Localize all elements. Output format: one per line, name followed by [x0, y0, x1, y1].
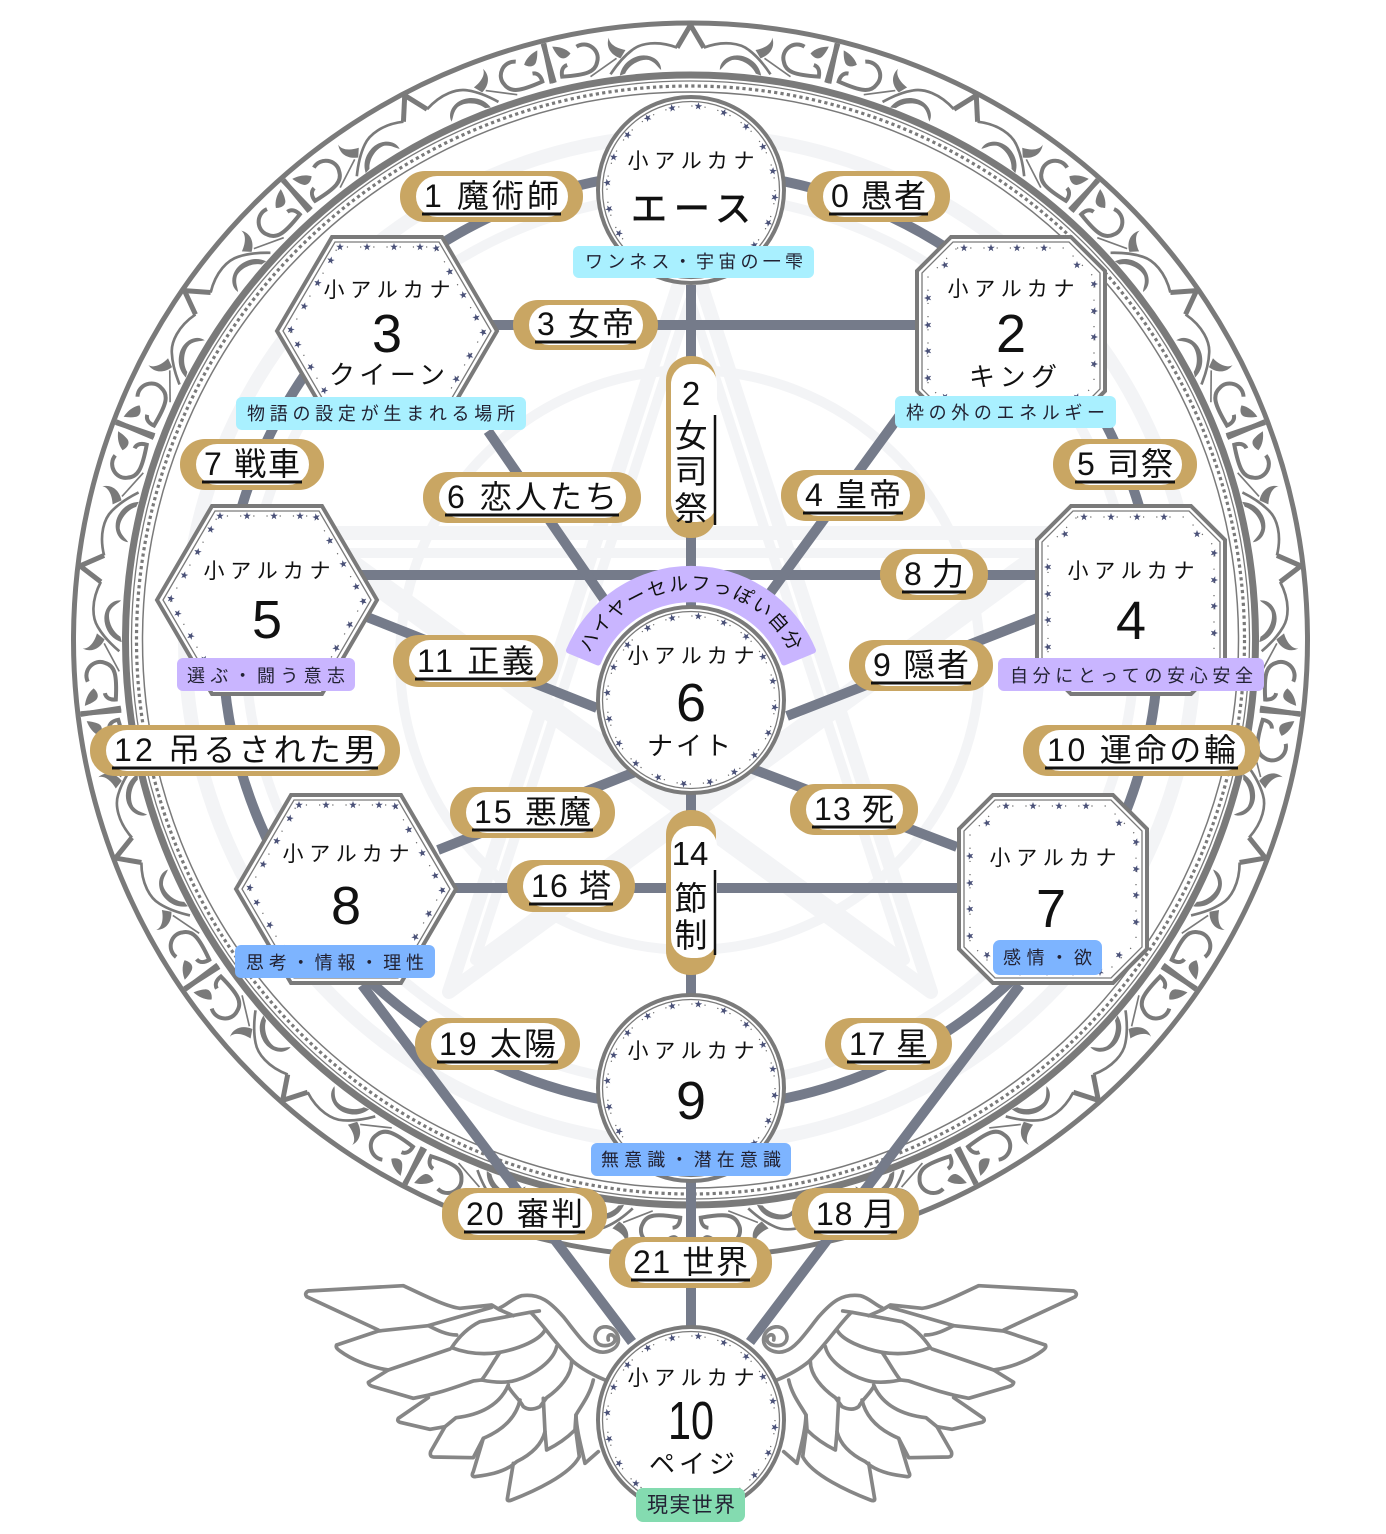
node: 9 — [598, 995, 784, 1181]
node: 6 ナイト: ナイト — [647, 731, 731, 761]
pill: 10 運命の輪: 10 運命の輪 — [1047, 732, 1236, 768]
vertical pill: 14 節制 — [666, 810, 717, 975]
node: 3 クイーン: クイーン — [329, 360, 445, 390]
label: 現実世界: 現実世界 — [647, 1494, 735, 1517]
node: 4: 小アルカナ — [1068, 560, 1194, 583]
label: 現実世界 — [636, 1488, 745, 1522]
pill: 0 愚者 — [807, 171, 950, 222]
pill: 12 吊るされた男 — [90, 725, 400, 776]
pill: 0 愚者: 0 愚者 — [831, 178, 926, 214]
node: 6 ナイト: 小アルカナ — [628, 645, 754, 668]
vertical pill: 2 女司祭: 2 — [682, 375, 700, 412]
pill: 18 月: 18 月 — [816, 1196, 895, 1232]
pill: 7 戦車: 7 戦車 — [204, 446, 300, 482]
vertical pill: 14 節制: 14 — [672, 835, 708, 872]
pill: 17 星: 17 星 — [849, 1026, 928, 1062]
label: 感情・欲 — [993, 940, 1102, 975]
pill: 3 女帝 — [513, 300, 658, 350]
label: 無意識・潜在意識 — [591, 1143, 791, 1176]
node: 8 — [236, 795, 456, 983]
node: 10 ペイジ: ペイジ — [649, 1449, 735, 1479]
node: 9: 小アルカナ — [628, 1040, 754, 1063]
pill: 4 皇帝: 4 皇帝 — [805, 477, 901, 513]
node: 8: 8 — [331, 876, 361, 936]
connecting paths — [222, 172, 1158, 1342]
pill: 20 審判: 20 審判 — [466, 1196, 583, 1232]
pill: 11 正義: 11 正義 — [417, 643, 534, 679]
pill: 7 戦車 — [180, 439, 324, 490]
pill: 20 審判 — [442, 1188, 607, 1240]
pill: 9 隠者 — [849, 640, 993, 691]
node: 4 — [1037, 506, 1225, 694]
label: 選ぶ・闘う意志 — [177, 658, 355, 691]
label: 物語の設定が生まれる場所 — [236, 397, 526, 430]
pill: 5 司祭 — [1053, 439, 1197, 490]
pill: 15 悪魔: 15 悪魔 — [474, 794, 591, 830]
vertical pill: 2 女司祭: 祭 — [674, 490, 708, 527]
vertical pill: 2 女司祭: 司 — [674, 453, 708, 490]
label: 物語の設定が生まれる場所: 物語の設定が生まれる場所 — [247, 404, 515, 424]
node: 2 キング: 小アルカナ — [948, 278, 1074, 301]
pill: 8 力: 8 力 — [904, 556, 964, 592]
node: 10 ペイジ — [598, 1327, 784, 1513]
node: 5 — [157, 506, 377, 694]
label: 無意識・潜在意識: 無意識・潜在意識 — [601, 1150, 781, 1170]
pill: 16 塔 — [507, 860, 635, 912]
pill: 16 塔: 16 塔 — [531, 868, 611, 904]
pill: 13 死: 13 死 — [814, 791, 894, 827]
node: エース: エース — [631, 188, 751, 229]
vertical pill: 2 女司祭: 女 — [674, 417, 708, 454]
node: 3 クイーン — [277, 237, 497, 425]
pill: 21 世界 — [609, 1237, 772, 1288]
pill: 4 皇帝 — [781, 470, 925, 521]
label: 感情・欲: 感情・欲 — [1003, 948, 1092, 968]
vertical pill: 14 節制: 制 — [674, 917, 708, 954]
pill: 6 恋人たち — [423, 472, 641, 523]
node: 8: 小アルカナ — [282, 843, 410, 866]
node: 10 ペイジ: 小アルカナ — [628, 1367, 754, 1390]
pill: 17 星 — [825, 1018, 952, 1070]
pill: 8 力 — [880, 549, 988, 600]
wing: left — [306, 1286, 618, 1501]
background magic circle pattern — [185, 135, 1195, 1145]
node: 6 ナイト — [598, 607, 784, 793]
pill: 6 恋人たち: 6 恋人たち — [447, 479, 617, 515]
label: 自分にとっての安心安全 — [998, 658, 1264, 691]
vertical pill: 14 節制: 節 — [674, 880, 708, 917]
node: 5: 5 — [252, 590, 282, 650]
pill: 15 悪魔 — [450, 787, 615, 838]
label: 思考・情報・理性 — [235, 945, 435, 978]
vertical pill: 2 女司祭 — [666, 356, 717, 538]
node: 7: 小アルカナ — [990, 847, 1116, 870]
node: 3 クイーン: 3 — [372, 304, 402, 364]
pill: 13 死 — [790, 784, 918, 835]
pill: 9 隠者: 9 隠者 — [873, 647, 969, 683]
node: 10 ペイジ: 10 — [668, 1391, 714, 1451]
node: 7 — [959, 795, 1147, 983]
node: 2 キング: キング — [969, 362, 1057, 392]
pill: 5 司祭: 5 司祭 — [1077, 446, 1173, 482]
label: 選ぶ・闘う意志: 選ぶ・闘う意志 — [187, 666, 345, 686]
pill: 12 吊るされた男: 12 吊るされた男 — [114, 732, 376, 768]
label: ワンネス・宇宙の一雫 — [573, 246, 814, 278]
node: 9: 9 — [676, 1071, 706, 1131]
pill: 1 魔術師 — [400, 171, 583, 222]
pill: 1 魔術師: 1 魔術師 — [424, 178, 559, 214]
node: 2 キング — [917, 237, 1105, 425]
label: 自分にとっての安心安全: 自分にとっての安心安全 — [1010, 666, 1253, 686]
node: 5: 小アルカナ — [204, 560, 330, 583]
node: エース: 小アルカナ — [628, 150, 754, 173]
node: 6 ナイト: 6 — [676, 673, 706, 733]
label: 思考・情報・理性: 思考・情報・理性 — [246, 953, 424, 973]
node: 2 キング: 2 — [996, 304, 1026, 364]
node: エース — [598, 97, 784, 283]
node: 3 クイーン: 小アルカナ — [324, 279, 450, 302]
node: 7: 7 — [1036, 879, 1066, 939]
label: 枠の外のエネルギー — [895, 396, 1116, 428]
pill: 18 月 — [792, 1188, 919, 1240]
label: ワンネス・宇宙の一雫: ワンネス・宇宙の一雫 — [585, 252, 803, 272]
pill: 3 女帝: 3 女帝 — [537, 306, 634, 342]
pill: 21 世界: 21 世界 — [633, 1244, 748, 1280]
label: 枠の外のエネルギー: 枠の外のエネルギー — [906, 403, 1105, 423]
pill: 19 太陽: 19 太陽 — [439, 1026, 556, 1062]
pill: 11 正義 — [393, 635, 558, 687]
wing: right — [764, 1286, 1076, 1501]
arc band: ハイヤーセルフっぽい自分: ハイヤーセルフっぽい自分 — [582, 576, 802, 652]
pill: 10 運命の輪 — [1023, 725, 1260, 776]
pill: 19 太陽 — [415, 1018, 580, 1070]
node: 4: 4 — [1116, 591, 1146, 651]
ornamental outer ring — [62, 23, 1319, 1272]
